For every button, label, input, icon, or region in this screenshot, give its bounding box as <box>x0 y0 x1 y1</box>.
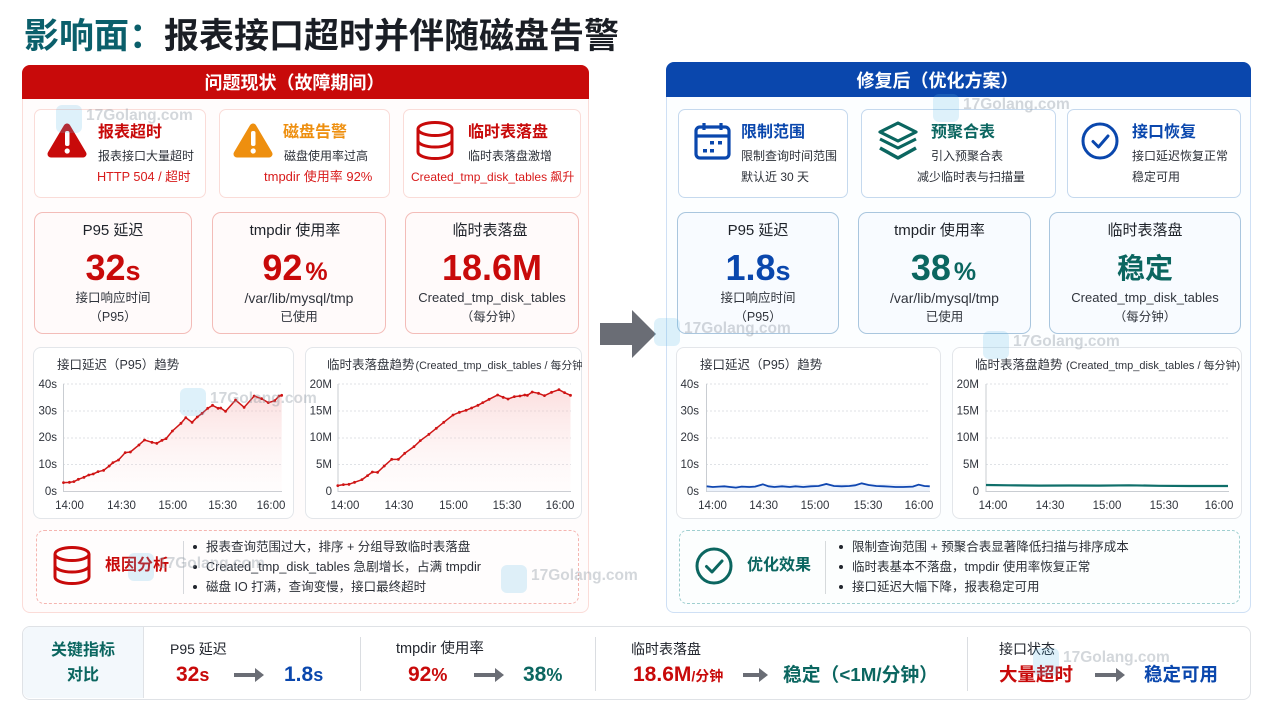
chart: temp table trend after: 临时表落盘趋势 (Created_tmp_disk_tables / 每分钟) <box>974 356 1240 372</box>
card line: 稳定可用 <box>1132 170 1180 184</box>
chart: temp table trend after <box>952 347 1242 519</box>
divider <box>595 637 596 691</box>
chart: latency trend before: 15:30 <box>208 500 236 512</box>
before value: 18.6M/分钟 <box>633 663 723 686</box>
card title: 临时表落盘 <box>468 124 548 141</box>
panel: problem status <box>22 65 589 613</box>
callout: optimisation result <box>679 530 1240 604</box>
watermark <box>501 565 638 593</box>
chart: temp table trend before: 0 <box>325 486 332 498</box>
panel header: problem status <box>22 65 589 99</box>
chart: latency trend before: 0s <box>44 486 57 498</box>
chart: latency trend before: 16:00 <box>256 500 285 512</box>
chart: latency trend after: 14:00 <box>698 500 726 512</box>
card: limit range <box>678 109 848 198</box>
chart: latency trend after: 16:00 <box>904 500 933 512</box>
metric description: Created_tmp_disk_tables <box>418 290 566 305</box>
comparison label: 临时表落盘 <box>631 641 701 657</box>
metric: P95 latency <box>34 212 192 334</box>
metric value: 32s <box>85 247 141 288</box>
watermark <box>983 331 1120 359</box>
title: 影响面：报表接口超时并伴随磁盘告警 <box>24 17 619 56</box>
metric label: tmpdir 使用率 <box>894 222 985 239</box>
watermark <box>180 388 317 416</box>
icon: database <box>54 546 90 585</box>
card: disk alert <box>219 109 390 198</box>
label line: 对比 <box>67 667 99 684</box>
card: temp tables on disk <box>403 109 581 198</box>
comparison: temp tables on disk <box>631 641 938 686</box>
card: interface recovered <box>1067 109 1241 198</box>
metric value: 38% <box>911 247 976 288</box>
metric value: 18.6M <box>442 247 542 288</box>
before value: 大量超时 <box>999 664 1073 685</box>
metric label: P95 延迟 <box>728 222 788 239</box>
chart: latency trend before: 15:00 <box>158 500 187 512</box>
watermark <box>1033 648 1170 676</box>
icon: check circle <box>1082 122 1118 160</box>
chart: latency trend after: 15:30 <box>853 500 882 512</box>
after value: 稳定（<1M/分钟） <box>783 664 938 685</box>
metric label: 临时表落盘 <box>1107 222 1182 239</box>
metric: temp tables on disk <box>405 212 579 334</box>
metric value: 稳定 <box>1117 253 1173 284</box>
arrow <box>234 668 264 682</box>
after value: 1.8s <box>284 663 323 686</box>
arrow <box>743 668 768 682</box>
chart: temp table trend before: 15M <box>309 405 332 417</box>
panel header: after the fix <box>666 62 1251 97</box>
chart: temp table trend before: 15:00 <box>439 500 467 512</box>
watermark: 17Golang.com <box>158 555 265 572</box>
chart: temp table trend after: 20M <box>956 378 978 390</box>
chart: latency trend before: 14:30 <box>107 500 135 512</box>
watermark: 17Golang.com <box>1063 649 1170 666</box>
chart: temp table trend before: 14:30 <box>384 500 413 512</box>
card status: tmpdir 使用率 92% <box>264 169 372 184</box>
callout: root cause analysis <box>36 530 579 604</box>
metric description: /var/lib/mysql/tmp <box>245 290 353 306</box>
chart: latency trend before: 14:00 <box>55 500 83 512</box>
chart: temp table trend after: 5M <box>963 458 978 470</box>
card title: 限制范围 <box>741 124 805 141</box>
watermark <box>654 318 791 346</box>
card: pre-aggregated table <box>861 109 1056 198</box>
bullet: 限制查询范围 + 预聚合表显著降低扫描与排序成本 <box>852 540 1129 554</box>
chart: temp table trend before: 15:30 <box>492 500 521 512</box>
comparison bar: key metrics <box>22 626 1251 700</box>
after value: 38% <box>523 663 562 686</box>
chart: temp table trend before <box>305 347 582 519</box>
after value: 稳定可用 <box>1144 664 1218 685</box>
chart: temp table trend after: 10M <box>956 432 978 444</box>
icon: red warning triangle <box>48 124 86 158</box>
label cell: key metrics comparison <box>23 627 144 698</box>
chart: temp table trend after: 15:00 <box>1092 500 1121 512</box>
panel header: problem status: 问题现状（故障期间） <box>204 73 384 93</box>
chart: temp table trend before: 16:00 <box>545 500 574 512</box>
chart: temp table trend after: 14:30 <box>1035 500 1064 512</box>
watermark: 17Golang.com <box>684 320 791 337</box>
metric description: 已使用 <box>926 310 963 324</box>
card title: 预聚合表 <box>931 124 995 141</box>
chart: latency trend after: 10s <box>680 458 699 470</box>
metric description: 已使用 <box>280 310 318 324</box>
icon: calendar <box>694 123 731 160</box>
watermark: 17Golang.com <box>86 107 193 124</box>
card line: 引入预聚合表 <box>931 149 1003 163</box>
icon: database <box>416 121 454 160</box>
metric description: （P95） <box>89 310 137 324</box>
metric description: /var/lib/mysql/tmp <box>890 290 999 306</box>
card line: 磁盘使用率过高 <box>284 149 368 163</box>
comparison: tmpdir usage <box>396 640 562 686</box>
chart: latency trend after <box>676 347 941 519</box>
card status: HTTP 504 / 超时 <box>97 170 191 184</box>
metric description: Created_tmp_disk_tables <box>1071 290 1219 305</box>
comparison label: P95 延迟 <box>170 641 227 657</box>
panel header: after the fix: 修复后（优化方案） <box>856 71 1018 91</box>
comparison label: tmpdir 使用率 <box>396 641 484 657</box>
card line: 报表接口大量超时 <box>98 149 194 163</box>
arrow <box>1095 668 1125 682</box>
metric description: （每分钟） <box>1114 310 1176 324</box>
metric: tmpdir usage <box>212 212 386 334</box>
card status: Created_tmp_disk_tables 飙升 <box>411 170 574 184</box>
card: report timeout <box>34 109 206 198</box>
bullet: 报表查询范围过大，排序 + 分组导致临时表落盘 <box>206 540 470 554</box>
panel: after the fix <box>666 62 1251 613</box>
chart: latency trend after: 0s <box>686 486 699 498</box>
chart: latency trend after: 14:30 <box>749 500 777 512</box>
metric label: P95 延迟 <box>83 222 143 239</box>
arrow <box>474 668 504 682</box>
watermark: 17Golang.com <box>1013 333 1120 350</box>
watermark: 17Golang.com <box>531 567 638 584</box>
bullet: Created_tmp_disk_tables 急剧增长，占满 tmpdir <box>206 560 481 574</box>
chart: temp table trend before: 临时表落盘趋势(Created_tmp_disk_tables / 每分钟) <box>326 356 582 372</box>
callout heading: 优化效果 <box>747 557 811 574</box>
chart: latency trend before: 40s <box>38 378 57 390</box>
label line: 关键指标 <box>51 642 115 659</box>
comparison: P95 latency <box>170 641 323 686</box>
card line: 默认近 30 天 <box>741 170 809 184</box>
metric label: 临时表落盘 <box>452 222 528 239</box>
icon: orange warning triangle <box>234 124 272 158</box>
chart: temp table trend after: 0 <box>972 486 978 498</box>
before value: 92% <box>408 663 447 686</box>
watermark: 17Golang.com <box>210 390 317 407</box>
metric: temp tables on disk <box>1049 212 1241 334</box>
card title: 磁盘告警 <box>283 124 347 141</box>
watermark <box>933 94 1070 122</box>
metric description: （每分钟） <box>461 310 523 324</box>
chart: temp table trend after: 15M <box>956 405 978 417</box>
metric: P95 latency <box>677 212 839 334</box>
chart: latency trend after: 30s <box>680 405 699 417</box>
comparison label: 接口状态 <box>999 641 1055 657</box>
metric description: 接口响应时间 <box>75 291 150 305</box>
metric value: 1.8s <box>725 247 791 288</box>
divider and bullet list <box>183 541 563 594</box>
chart: temp table trend after: 14:00 <box>978 500 1007 512</box>
chart: temp table trend after: 15:30 <box>1149 500 1178 512</box>
bullet: 临时表基本不落盘，tmpdir 使用率恢复正常 <box>852 560 1090 574</box>
metric: tmpdir usage <box>858 212 1031 334</box>
chart: latency trend before <box>33 347 294 519</box>
chart: temp table trend after: 16:00 <box>1204 500 1233 512</box>
callout heading: 根因分析 <box>105 557 169 574</box>
chart: latency trend after: 40s <box>680 378 699 390</box>
card line: 减少临时表与扫描量 <box>917 170 1025 184</box>
arrow: before to after <box>600 310 656 358</box>
chart: latency trend before: 30s <box>38 405 57 417</box>
chart: latency trend after: 15:00 <box>800 500 829 512</box>
divider <box>360 637 361 691</box>
chart: temp table trend before: 10M <box>309 432 332 444</box>
chart: latency trend before: 10s <box>38 458 57 470</box>
metric value: 92% <box>262 247 328 288</box>
chart: temp table trend before: 20M <box>309 378 332 390</box>
card line: 限制查询时间范围 <box>741 149 837 163</box>
icon: layers <box>878 121 918 160</box>
divider <box>967 637 968 691</box>
card line: 临时表落盘激增 <box>468 149 552 163</box>
chart: temp table trend before: 14:00 <box>330 500 359 512</box>
comparison: interface status <box>999 641 1218 685</box>
bullet: 磁盘 IO 打满，查询变慢，接口最终超时 <box>206 580 426 594</box>
metric label: tmpdir 使用率 <box>250 222 340 239</box>
chart: latency trend before: 接口延迟（P95）趋势 <box>56 356 179 372</box>
card title: 报表超时 <box>98 124 162 141</box>
divider and bullet list <box>825 541 1215 594</box>
card title: 接口恢复 <box>1132 124 1196 141</box>
chart: latency trend before: 20s <box>38 432 57 444</box>
chart: latency trend after: 20s <box>680 432 699 444</box>
before value: 32s <box>176 663 209 686</box>
metric description: 接口响应时间 <box>720 291 796 305</box>
metric description: （P95） <box>734 310 782 324</box>
card line: 接口延迟恢复正常 <box>1132 149 1228 163</box>
chart: temp table trend before: 5M <box>316 458 332 470</box>
icon: check circle <box>696 548 732 584</box>
chart: latency trend after: 接口延迟（P95）趋势 <box>700 356 822 372</box>
watermark <box>128 553 265 581</box>
bullet: 接口延迟大幅下降，报表稳定可用 <box>852 580 1040 594</box>
watermark <box>56 105 193 133</box>
watermark: 17Golang.com <box>963 96 1070 113</box>
